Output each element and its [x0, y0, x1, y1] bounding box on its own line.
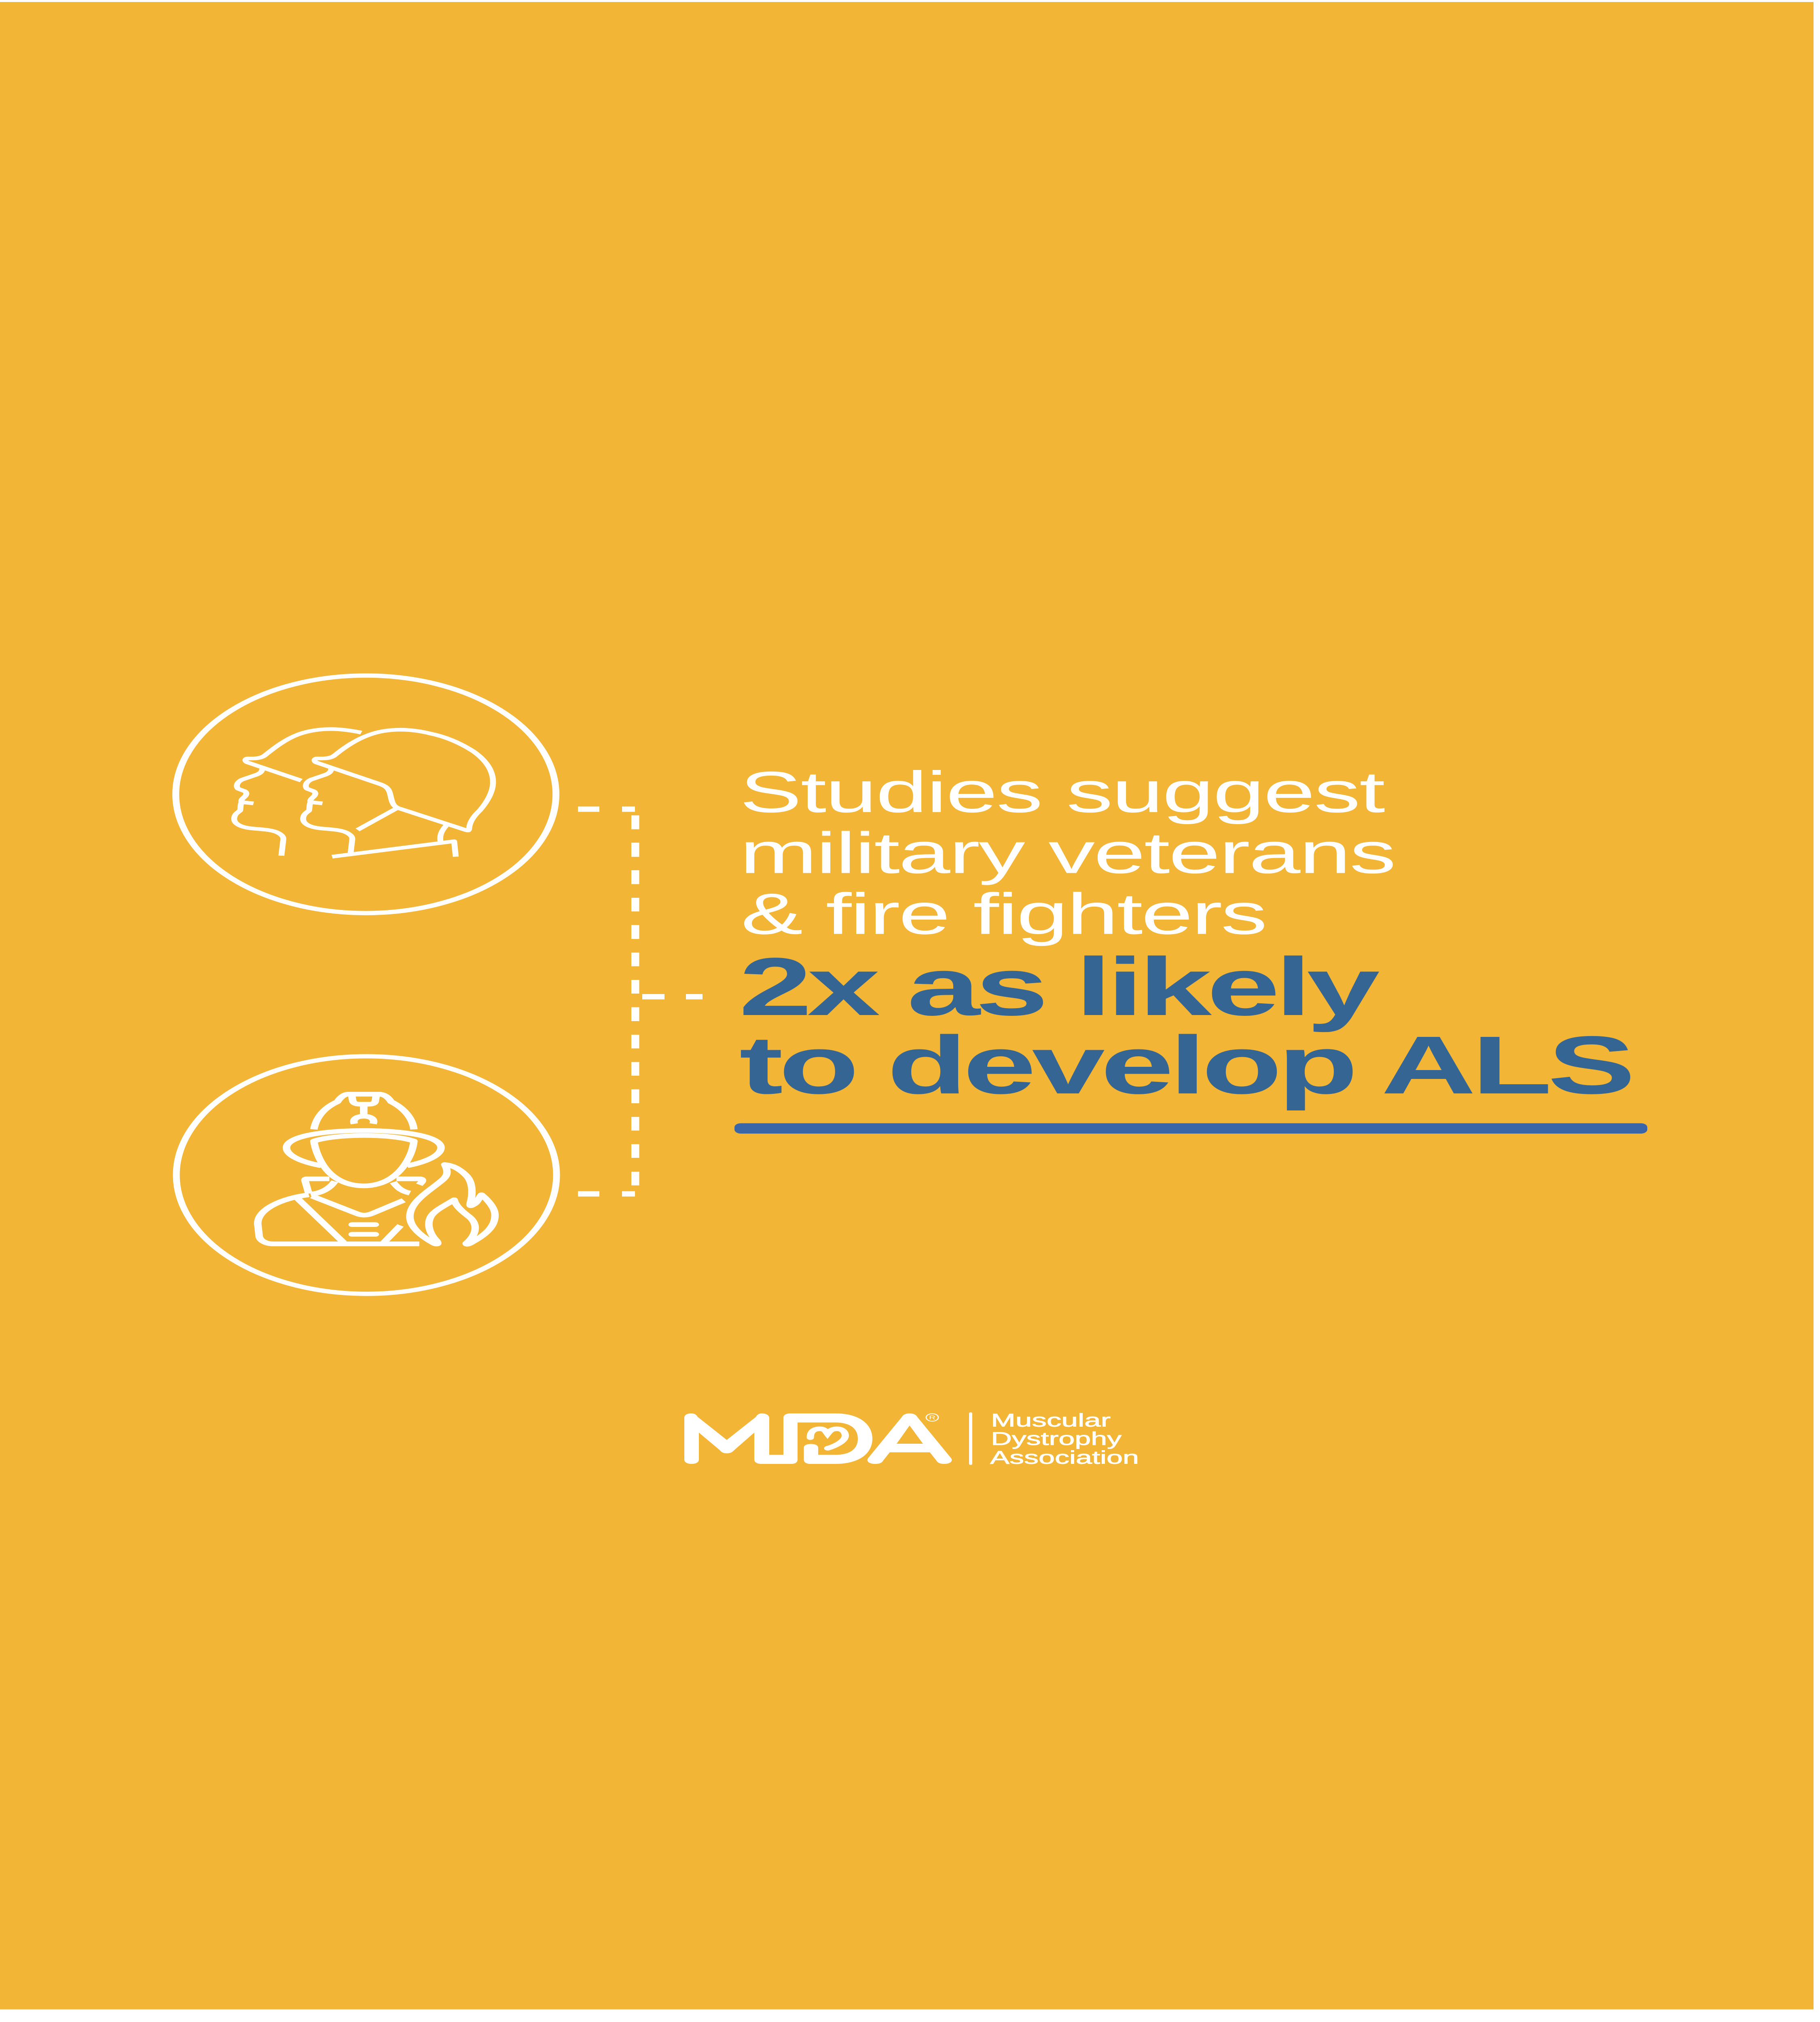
headline underline	[734, 1123, 1647, 1134]
logo wordmark: Dystrophy	[991, 1429, 1122, 1449]
registered mark: R	[929, 1414, 935, 1421]
intro text: military veterans	[740, 820, 1395, 885]
icon ring: firefighter	[176, 1056, 557, 1294]
headline statistic: 2x as likely	[739, 941, 1381, 1033]
dashed connector bracket	[578, 806, 703, 1197]
intro text	[740, 759, 1395, 946]
icon: firefighter in circle	[176, 1056, 557, 1294]
logo wordmark: Muscular	[991, 1410, 1111, 1430]
MDA logo	[684, 1410, 1139, 1468]
icon: two helmeted profiles	[234, 729, 493, 857]
logo wordmark	[990, 1410, 1139, 1468]
headline statistic	[739, 941, 1632, 1111]
intro text: & fire fighters	[741, 881, 1266, 946]
headline statistic: to develop ALS	[739, 1019, 1632, 1111]
logo divider	[969, 1412, 972, 1465]
logo wordmark: Association	[990, 1447, 1139, 1468]
registered mark	[926, 1414, 938, 1421]
icon: firefighter with flames	[258, 1094, 495, 1244]
icon ring: veterans	[176, 675, 556, 913]
logo mark: MDA letters	[684, 1413, 952, 1464]
icon: military veterans in circle	[176, 675, 556, 913]
logo heart	[811, 1429, 845, 1448]
intro text: Studies suggest	[740, 759, 1384, 825]
